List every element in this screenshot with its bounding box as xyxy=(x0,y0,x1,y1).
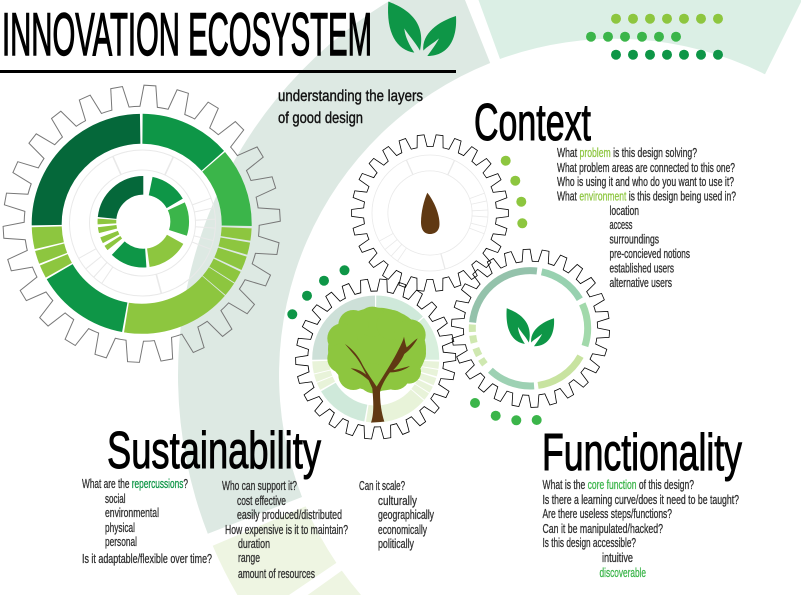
text block: functionality questions: What is the core function of this design? xyxy=(542,477,694,492)
text block: sustainability column 2: duration xyxy=(238,536,270,551)
gear outline xyxy=(451,248,610,408)
icon: tree xyxy=(327,307,426,423)
text block: sustainability column 1: physical xyxy=(105,520,135,535)
icon: seed xyxy=(421,193,440,234)
pale ring segments xyxy=(321,304,431,414)
subtitle: of good design xyxy=(278,110,363,127)
text block: sustainability column 2: easily produced/distributed xyxy=(237,507,342,522)
text block: functionality questions: Are there useless steps/functions? xyxy=(542,506,672,521)
text block: sustainability column 2: range xyxy=(238,550,260,565)
text block: context questions xyxy=(557,145,736,290)
text block: context questions: location xyxy=(610,203,639,218)
text block: sustainability column 1: personal xyxy=(105,534,137,549)
background: large pale arc bands xyxy=(178,0,801,595)
text block: sustainability column 3 xyxy=(359,478,434,551)
thin ring segments xyxy=(472,271,588,386)
subtitle xyxy=(278,88,423,127)
text block: context questions: established users xyxy=(610,260,674,276)
text block: sustainability column 2: amount of resources xyxy=(238,566,315,581)
text block: context questions: alternative users xyxy=(610,275,672,290)
context dots xyxy=(501,156,527,228)
text block: sustainability column 2 xyxy=(222,478,348,581)
sustainability dots xyxy=(287,265,350,319)
text block: sustainability column 1: Is it adaptable/flexible over time? xyxy=(82,551,212,566)
text block: sustainability column 2: Who can support it? xyxy=(222,478,297,493)
text block: functionality questions: intuitive xyxy=(602,550,633,565)
text block: context questions: surroundings xyxy=(610,232,659,246)
gear outline xyxy=(295,278,456,440)
text: INNOVATION ECOSYSTEM xyxy=(2,1,372,68)
functionality dots xyxy=(470,398,542,425)
text block: functionality questions xyxy=(542,477,739,580)
big gear: overview sunburst xyxy=(0,78,288,370)
gear outline xyxy=(351,134,509,292)
text block: sustainability column 1 xyxy=(82,476,212,566)
text block: context questions: What problem is this design solving? xyxy=(557,145,697,160)
text block: sustainability column 3: geographically xyxy=(378,507,434,522)
text block: sustainability column 3: politically xyxy=(378,536,414,551)
text block: sustainability column 3: Can it scale? xyxy=(359,478,405,493)
text block: functionality questions: Can it be manipulated/hacked? xyxy=(542,521,663,536)
text block: sustainability column 2: cost effective xyxy=(237,493,286,508)
inner ring segments xyxy=(107,185,180,258)
icon: leaves xyxy=(506,308,554,346)
text block: context questions: What environment is this design being used in? xyxy=(557,189,736,204)
faint ring xyxy=(372,155,488,271)
text block: sustainability column 2: How expensive is it to maintain? xyxy=(225,522,348,537)
text block: context questions: access xyxy=(610,217,633,232)
heading: Context: Context xyxy=(474,94,591,152)
text block: sustainability column 3: economically xyxy=(378,522,427,537)
text block: functionality questions: discoverable xyxy=(600,565,646,580)
text block: functionality questions: Is this design accessible? xyxy=(542,535,636,550)
icon: title leaves xyxy=(388,2,456,56)
text block: sustainability column 3: culturally xyxy=(378,493,417,508)
heading: Sustainability: Sustainability xyxy=(107,422,321,480)
outer ring segments xyxy=(47,129,237,319)
sustainability gear with tree xyxy=(295,278,456,440)
gear outline xyxy=(0,78,288,370)
dot rows top right xyxy=(586,14,723,60)
text block: sustainability column 1: What are the repercussions? xyxy=(82,476,188,491)
text block: sustainability column 1: social xyxy=(105,491,126,506)
text block: sustainability column 1: environmental xyxy=(105,505,159,520)
functionality gear with leaves xyxy=(451,248,610,408)
subtitle: understanding the layers xyxy=(278,88,423,105)
context gear with seed xyxy=(351,134,509,292)
faint middle ring xyxy=(70,150,216,296)
text block: context questions: pre-concieved notions xyxy=(610,246,690,261)
title underline xyxy=(0,70,456,73)
